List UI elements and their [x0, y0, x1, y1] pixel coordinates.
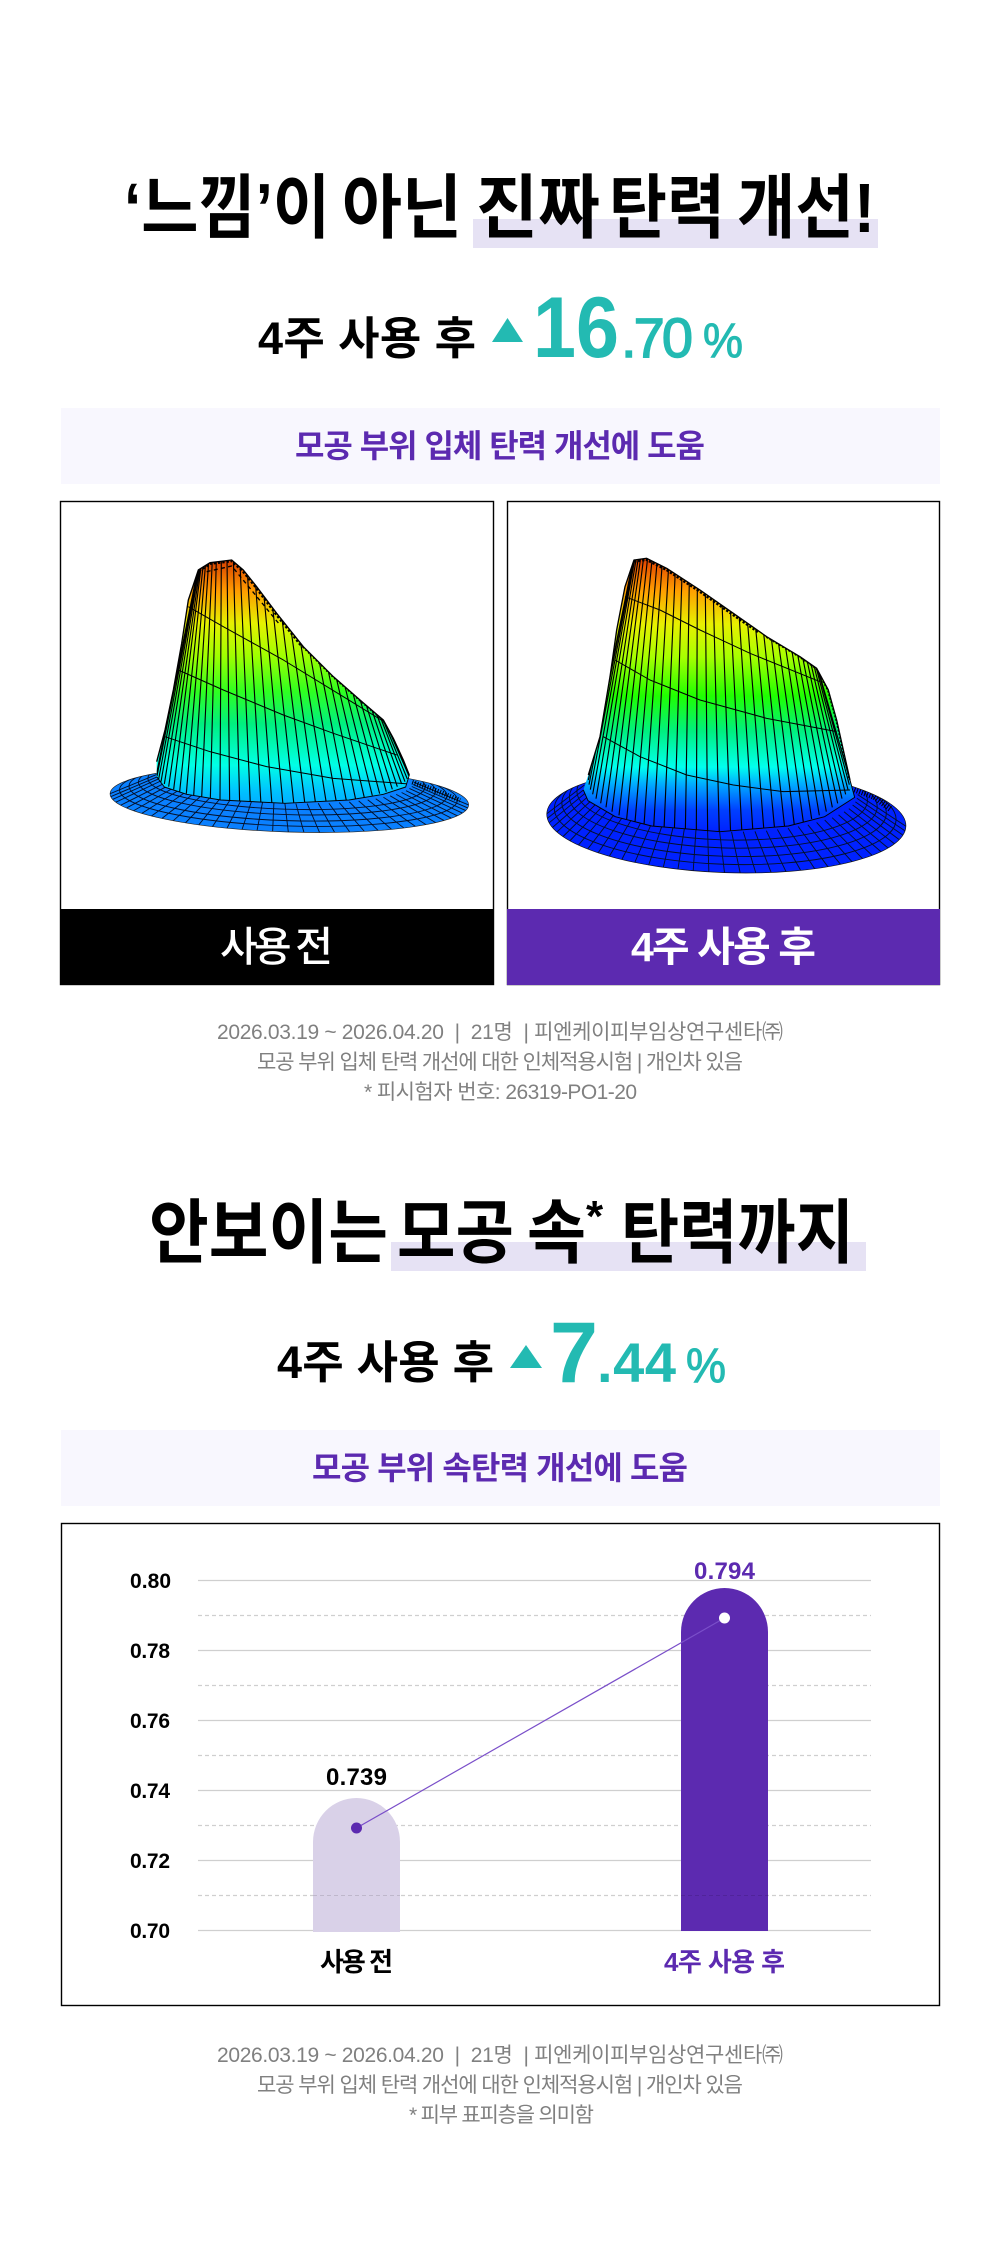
result line: 16.70% after 4 weeks — [258, 280, 743, 376]
panel: before use 3D surface — [60, 502, 494, 985]
y axis labels: 0.80 — [130, 1570, 171, 1593]
result line: 7.44% after 4 weeks: % — [686, 1340, 726, 1393]
panel: bar chart of deep elasticity — [62, 1524, 940, 2006]
label bar: before use — [60, 909, 493, 985]
footnote: section 2 study details: * 피부 표피층을 의미함 — [409, 2104, 594, 2127]
x axis label: after: 4주 사용 후 — [664, 1947, 785, 1977]
data point: before — [351, 1822, 362, 1834]
y axis gridlines — [198, 1580, 871, 1930]
chart: before-use elasticity surface — [109, 557, 470, 838]
result line: 16.70% after 4 weeks: % — [703, 315, 743, 368]
y axis labels: 0.74 — [130, 1780, 170, 1803]
bar: before use — [313, 1798, 400, 1932]
heading: section 2 title: 탄력까지 — [621, 1194, 854, 1272]
data point: after — [719, 1612, 730, 1624]
heading: section 2 title: 모공 — [397, 1194, 514, 1272]
y axis labels: 0.78 — [130, 1640, 170, 1663]
result line: 7.44% after 4 weeks — [277, 1305, 726, 1401]
subtitle band: section 2: 모공 부위 속탄력 개선에 도움 — [312, 1450, 688, 1486]
icon: up triangle — [492, 318, 523, 342]
value label: after: 0.794 — [694, 1558, 756, 1585]
bar: after 4 weeks — [681, 1588, 768, 1931]
heading: section 1 title: 개선! — [737, 169, 875, 247]
x axis label: before: 사용 전 — [320, 1947, 393, 1977]
footnote: section 1 study details: 모공 부위 입체 탄력 개선에 대한 인체적용시험 | 개인차 있음 — [257, 1051, 743, 1074]
chart: after-use elasticity surface — [545, 555, 908, 879]
y axis labels: 0.70 — [130, 1920, 170, 1943]
subtitle band: section 2 — [61, 1430, 940, 1506]
heading: section 1 title: 아닌 — [342, 169, 462, 247]
heading: section 1 title: ‘느낌’이 — [124, 169, 330, 247]
result line: 16.70% after 4 weeks: 16 — [533, 280, 619, 376]
result line: 7.44% after 4 weeks: 4주 사용 후 — [277, 1337, 494, 1388]
icon: up triangle — [510, 1345, 542, 1368]
heading: section 2 title: 속 — [527, 1194, 586, 1272]
footnote: section 1 study details: * 피시험자 번호: 26319-PO1-20 — [364, 1081, 637, 1104]
footnote: section 2 study details: 2026.03.19 ~ 2026.04.20 | 21명 | 피엔케이피부임상연구센타㈜ — [217, 2044, 783, 2067]
y axis labels: 0.76 — [130, 1710, 170, 1733]
footnote: section 2 study details — [217, 2044, 783, 2127]
subtitle band: section 1 — [61, 408, 940, 484]
result line: 7.44% after 4 weeks: .44 — [597, 1331, 676, 1394]
label bar: before use: 사용 전 — [220, 924, 333, 970]
heading: section 2 title: * — [586, 1192, 604, 1241]
result line: 7.44% after 4 weeks: 7 — [550, 1305, 598, 1401]
y axis labels — [130, 1570, 171, 1943]
heading: section 2 title — [149, 1192, 866, 1272]
trend line between bars — [356, 1618, 724, 1828]
heading: section 1 title — [124, 169, 878, 248]
y axis labels: 0.72 — [130, 1850, 170, 1873]
footnote: section 2 study details: 모공 부위 입체 탄력 개선에 대한 인체적용시험 | 개인차 있음 — [257, 2074, 743, 2097]
value label: before: 0.739 — [326, 1764, 387, 1791]
heading: section 2 title: 안보이는 — [149, 1194, 388, 1272]
heading: section 1 title: 탄력 — [609, 169, 725, 247]
subtitle band: section 1: 모공 부위 입체 탄력 개선에 도움 — [295, 428, 705, 464]
result line: 16.70% after 4 weeks: 4주 사용 후 — [258, 313, 476, 364]
footnote: section 1 study details: 2026.03.19 ~ 2026.04.20 | 21명 | 피엔케이피부임상연구센타㈜ — [217, 1021, 783, 1044]
panel: after 4 weeks 3D surface — [507, 502, 940, 985]
result line: 16.70% after 4 weeks: .70 — [621, 306, 693, 369]
label bar: after 4 weeks: 4주 사용 후 — [631, 924, 816, 970]
heading: section 1 title: 진짜 — [476, 169, 600, 247]
label bar: after 4 weeks — [507, 909, 940, 985]
footnote: section 1 study details — [217, 1021, 783, 1104]
